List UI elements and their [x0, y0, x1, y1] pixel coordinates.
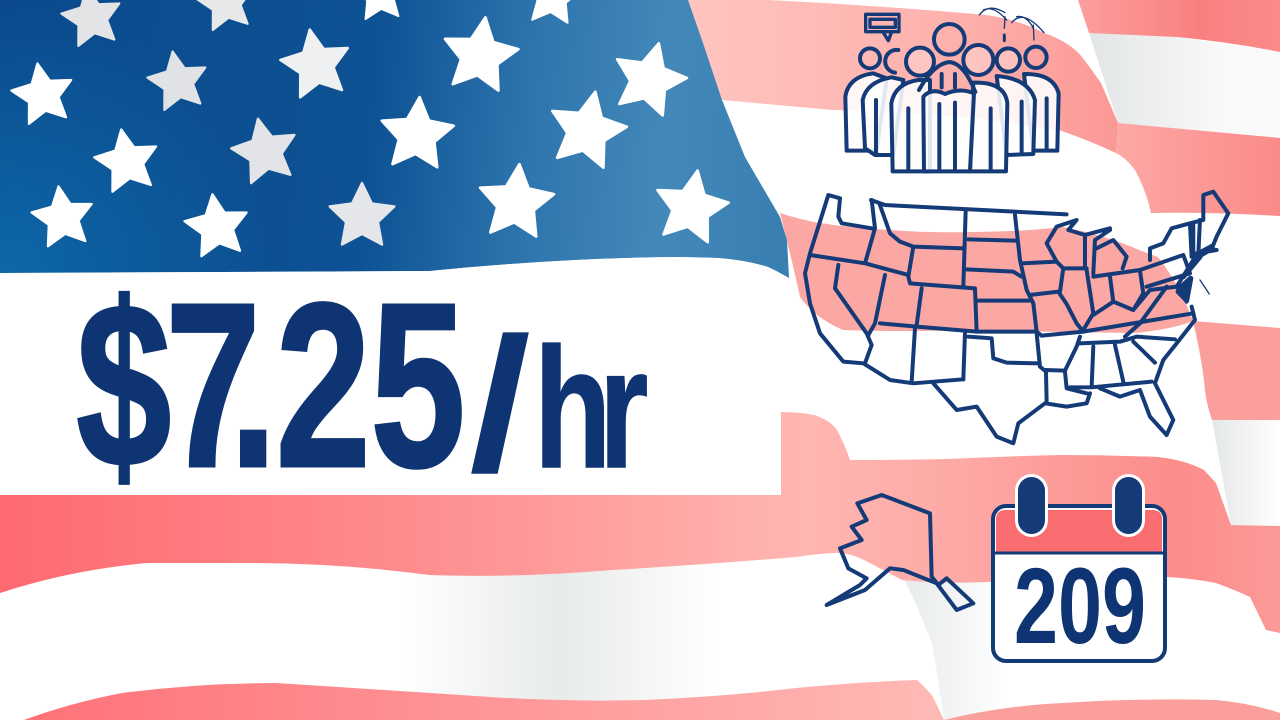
calendar body	[993, 506, 1165, 661]
stripe: upper right	[1116, 123, 1280, 216]
west and southern outline	[805, 195, 963, 383]
stripe: top centre	[688, 0, 1118, 153]
inner lines	[876, 74, 1047, 170]
stripe: middle right	[1193, 321, 1280, 420]
panel: white wage band	[0, 257, 780, 495]
northern border	[871, 200, 1067, 214]
stripe: behind map	[780, 213, 1193, 333]
plains states	[963, 212, 1087, 332]
stripe shading: right whites	[1089, 33, 1280, 138]
people bodies	[845, 73, 1059, 171]
icon: palm trees	[979, 8, 1044, 41]
calendar number: 209	[1014, 545, 1146, 666]
people heads	[860, 24, 1047, 76]
panel: blue canton	[0, 0, 789, 278]
heading: hourly wage: /	[469, 299, 531, 511]
mid-atlantic	[1133, 192, 1228, 323]
western states	[810, 200, 1193, 382]
stripe: bottom right	[944, 699, 1280, 720]
stripe: fold shading	[902, 575, 1020, 720]
map: contiguous United States	[805, 192, 1228, 443]
icon: group of people	[845, 8, 1059, 171]
stripe: top right	[1078, 0, 1280, 52]
stripe: large lower red	[0, 412, 1280, 633]
great lakes	[1047, 220, 1190, 330]
heading: hourly wage	[76, 256, 648, 516]
icon: calendar	[993, 474, 1165, 666]
panel: canton glow	[0, 0, 400, 273]
calendar rings	[1015, 474, 1048, 537]
stripe: white band centre shading	[400, 555, 720, 705]
stripe: bottom left	[24, 680, 944, 720]
heading: hourly wage: hr	[534, 312, 648, 503]
shoulders of centre person	[919, 62, 975, 92]
heading: hourly wage: $7.25	[76, 256, 465, 516]
icon: Alaska outline	[827, 495, 973, 610]
calendar header	[996, 510, 1162, 553]
stars on canton	[8, 0, 733, 258]
texas and south	[933, 307, 1195, 443]
icon: speech bubble	[866, 14, 899, 41]
